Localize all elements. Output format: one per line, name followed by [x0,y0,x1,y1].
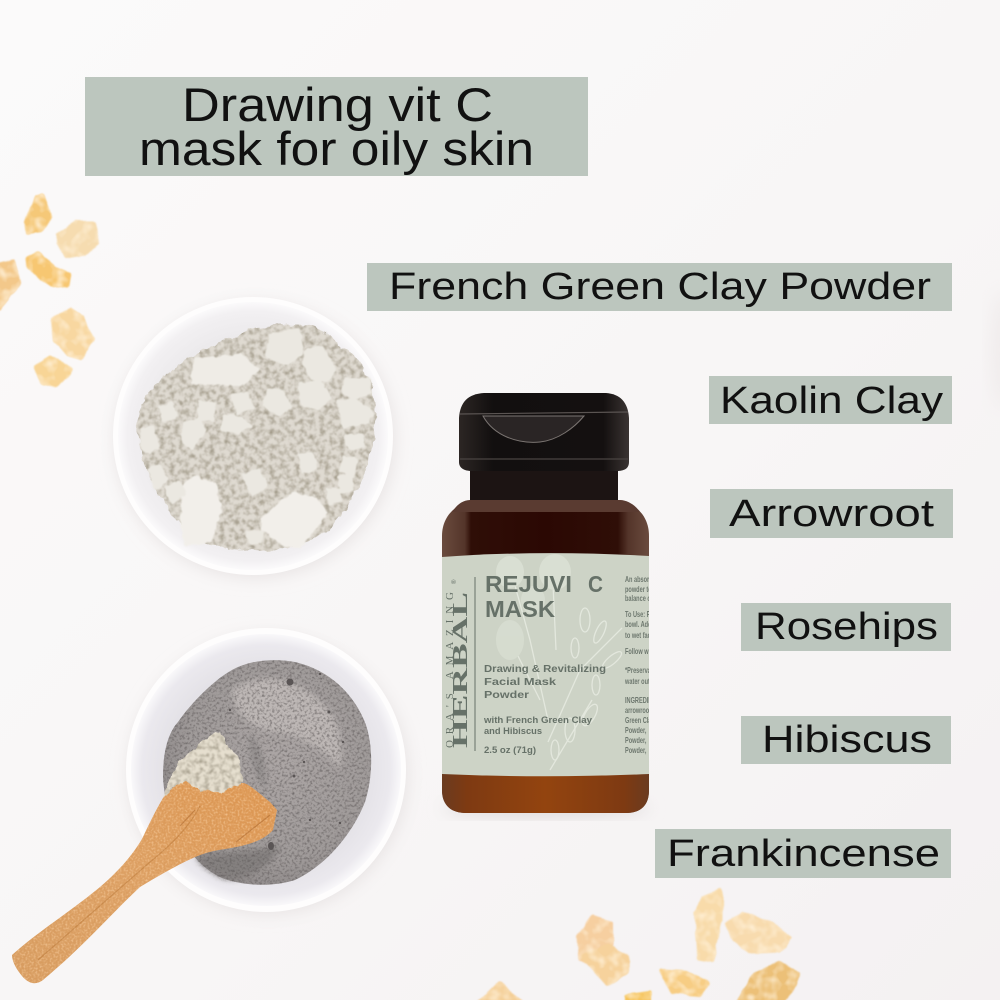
ingredient: Arrowroot: Arrowroot [729,493,935,535]
shoulder highlight [452,500,640,512]
side panel text: water out [624,678,650,686]
side panel text: INGREDIENTS [625,697,664,705]
product label: Facial Mask [484,676,556,688]
glass body [442,500,649,813]
product label: with French Green Clay [483,715,592,725]
product label: HERBAL [448,592,472,748]
ingredient: Frankincense [655,829,951,878]
panel: title: mask for oily skin [139,122,534,175]
frankincense resin, left group [0,195,98,386]
ingredient: Rosehips: Rosehips [755,606,938,648]
product label: MASK [485,596,555,622]
ingredient: Kaolin Clay [709,376,952,424]
grey mask paste [163,660,371,885]
wooden spoon [12,732,277,983]
clay chunks [142,330,372,546]
ingredient: French Green Clay Powder [367,263,952,311]
ingredient: Arrowroot [710,489,953,538]
side panel text: powder to gent [625,586,666,594]
product label: ® [451,579,458,584]
side panel text: balance oil [625,595,654,603]
ingredient: Kaolin Clay: Kaolin Clay [720,380,943,422]
ingredient: Rosehips [741,603,951,651]
side panel text: To Use: Prep [625,611,659,619]
ingredient: Hibiscus [741,716,951,764]
product name: C [588,571,603,597]
bowl of mixed mask [126,628,408,914]
product label [442,553,649,776]
side panel text: bowl. Add [625,621,651,629]
bottle neck [470,462,618,506]
product name: REJUVI [485,571,572,597]
paste specks [229,673,344,850]
soft light blob at right edge [994,290,1000,410]
ingredient: Frankincense: Frankincense [667,833,940,875]
ingredient: French Green Clay Powder: French Green Clay Powder [389,266,931,308]
side panel text: An absorbent [625,576,662,584]
botanical line art [496,554,624,770]
side panel text: Powder, [625,727,646,735]
side panel text: arrowroot [625,707,652,715]
side panel text: to wet face [625,632,654,640]
product label: 2.5 oz (71g) [484,745,536,755]
side panel text: Powder, [625,737,646,745]
bowl of clay powder [113,297,395,578]
clay powder pile [138,324,375,550]
ingredient: Hibiscus: Hibiscus [762,719,932,761]
product bottle [442,393,666,816]
product description: Drawing & Revitalizing [484,663,606,675]
panel: title [85,77,588,176]
side panel text: *Preservative [625,667,661,675]
product label: Powder [484,689,529,701]
powder on spoon [163,732,243,797]
frankincense resin, bottom group [479,891,799,1000]
side panel text [625,576,649,754]
flip cap [459,393,629,471]
panel: title: Drawing vit C [182,78,493,131]
side panel text: Green Clay [625,717,655,725]
side panel text: Follow with [625,648,655,656]
brand name, vertical: ORA'S AMAZING [444,592,456,748]
product label: and Hibiscus [484,726,542,736]
side panel text: Powder, [625,747,646,755]
amber lower glass [442,770,649,813]
